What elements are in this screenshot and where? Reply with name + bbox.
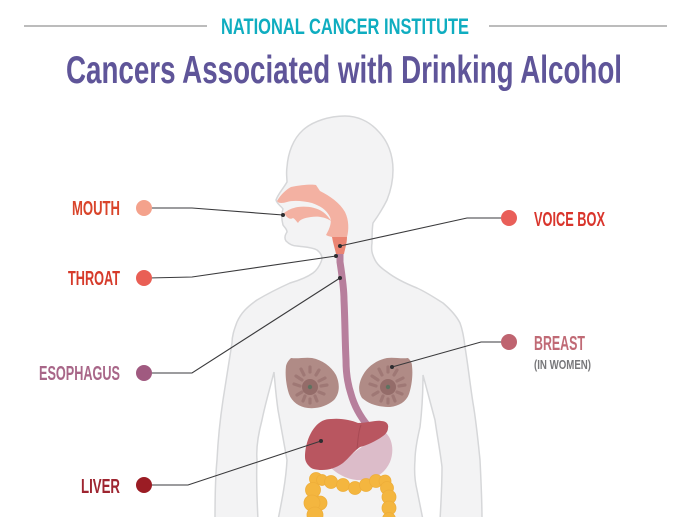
- callout: esophagus: [39, 276, 342, 385]
- callout: breast: [390, 332, 591, 372]
- organ: voice box and throat: [332, 237, 347, 254]
- organ: stomach: [331, 433, 392, 480]
- callout: mouth: [72, 197, 285, 220]
- callout: liver: [81, 439, 323, 498]
- callout: throat: [68, 254, 338, 290]
- callout: breast: BREAST: [534, 332, 585, 355]
- callout: throat: THROAT: [68, 267, 120, 290]
- callout: voice box: VOICE BOX: [534, 208, 605, 231]
- callout: esophagus: ESOPHAGUS: [39, 362, 120, 385]
- organ: liver: [305, 419, 388, 470]
- callout: liver: LIVER: [81, 475, 120, 498]
- organ: large intestine: [304, 472, 396, 517]
- organ: esophagus: [340, 254, 368, 426]
- callout: voice box: [338, 208, 605, 248]
- header: National Cancer Institute: NATIONAL CANCER INSTITUTE: [221, 14, 469, 39]
- organ: mouth and nasal cavity: [277, 185, 348, 237]
- callout: breast: (IN WOMEN): [534, 357, 591, 372]
- organ: left breast: [286, 358, 339, 408]
- callout: mouth: MOUTH: [72, 197, 120, 220]
- organ: right breast: [359, 358, 412, 407]
- body silhouette: [215, 116, 482, 517]
